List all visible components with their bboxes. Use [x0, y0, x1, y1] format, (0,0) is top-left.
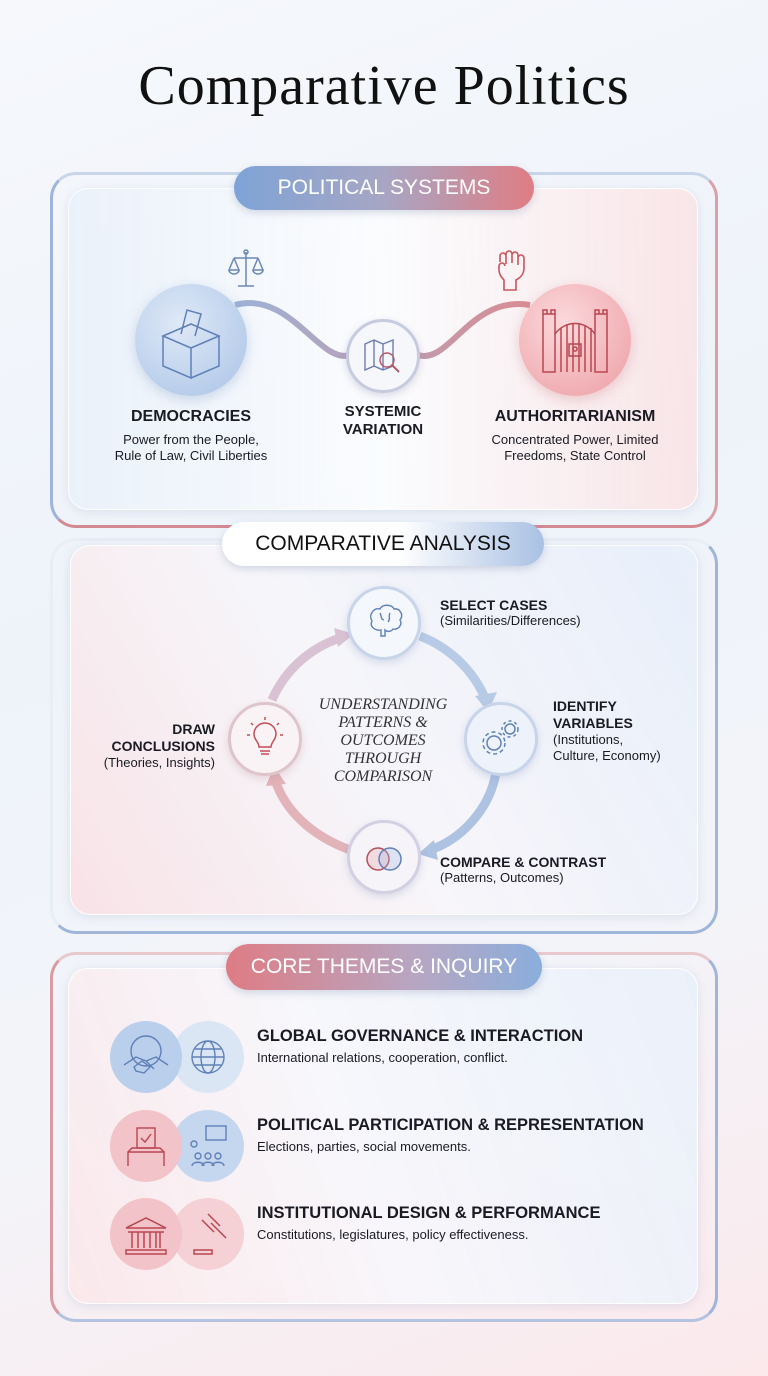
- heading pill: core themes: CORE THEMES & INQUIRY: [251, 955, 517, 978]
- icon: scales: [228, 249, 264, 287]
- text: draw conclusions: [104, 721, 215, 770]
- heading pill: political systems: [234, 166, 534, 210]
- text: select cases: (Similarities/Differences): [440, 613, 581, 628]
- text: identify variables: Culture, Economy): [553, 748, 661, 763]
- icon: lightbulb circle: [228, 702, 302, 776]
- text: compare & contrast: (Patterns, Outcomes): [440, 870, 564, 885]
- row: political participation: [110, 1110, 644, 1182]
- text: draw conclusions: (Theories, Insights): [104, 755, 215, 770]
- heading pill: core themes: [226, 944, 542, 990]
- icon: venn circle: [347, 820, 421, 894]
- heading pill: political systems: POLITICAL SYSTEMS: [278, 176, 490, 199]
- row: global governance: International relations, cooperation, conflict.: [257, 1050, 508, 1065]
- text: select cases: SELECT CASES: [440, 597, 547, 613]
- icon: democracy ballot box circle: [135, 284, 247, 396]
- icon: authoritarian gate circle: [519, 284, 631, 396]
- text: authoritarianism: AUTHORITARIANISM: [495, 408, 655, 425]
- text: democracies: DEMOCRACIES: [131, 408, 251, 425]
- text: authoritarianism: Concentrated Power, Limited: [492, 432, 658, 447]
- icon: ballot and crowd: [172, 1110, 244, 1182]
- text: authoritarianism: [492, 408, 658, 463]
- text: systemic variation: VARIATION: [343, 421, 423, 438]
- text: authoritarianism: Freedoms, State Control: [504, 448, 646, 463]
- text: select cases: [440, 597, 581, 628]
- text: compare & contrast: [440, 854, 606, 885]
- text: systemic variation: [343, 403, 423, 438]
- row: political participation: POLITICAL PARTICIPATION & REPRESENTATION: [257, 1116, 644, 1134]
- panel: political systems: [50, 166, 718, 528]
- row: global governance: GLOBAL GOVERNANCE & INTERACTION: [257, 1027, 583, 1045]
- icon: gears circle: [464, 702, 538, 776]
- icon: handshake globe: [172, 1021, 244, 1093]
- title: Comparative Politics: [138, 55, 630, 117]
- row: institutional design: INSTITUTIONAL DESIGN & PERFORMANCE: [257, 1204, 600, 1222]
- text: identify variables: (Institutions,: [553, 732, 623, 747]
- text: center italic: UNDERSTANDING PATTERNS & OUTCOMES THROUGH COMPARISON: [319, 696, 447, 785]
- icon: systemic variation map circle: [346, 319, 420, 393]
- text: identify variables: [553, 698, 661, 763]
- row: institutional design: Constitutions, legislatures, policy effectiveness.: [257, 1227, 528, 1242]
- icon: fist: [498, 250, 525, 291]
- text: identify variables: IDENTIFY: [553, 698, 617, 714]
- icon: brain circle: [347, 586, 421, 660]
- text: identify variables: VARIABLES: [553, 715, 633, 731]
- cycle arrows: [266, 628, 500, 860]
- text: compare & contrast: COMPARE & CONTRAST: [440, 854, 606, 870]
- text: democracies: Power from the People,: [123, 432, 259, 447]
- heading pill: comparative analysis: COMPARATIVE ANALYSIS: [255, 532, 511, 555]
- row: political participation: Elections, parties, social movements.: [257, 1139, 471, 1154]
- icon: building and gavel: [172, 1198, 244, 1270]
- panel: comparative analysis: [50, 522, 718, 934]
- text: draw conclusions: DRAW: [172, 721, 215, 737]
- text: democracies: [115, 408, 267, 463]
- panel: core themes: [50, 944, 718, 1322]
- wave connector: [234, 300, 530, 359]
- text: democracies: Rule of Law, Civil Liberties: [115, 448, 267, 463]
- heading pill: comparative analysis: [222, 522, 544, 566]
- row: institutional design: [110, 1198, 600, 1270]
- text: systemic variation: SYSTEMIC: [345, 403, 421, 420]
- row: global governance: [110, 1021, 583, 1093]
- text: draw conclusions: CONCLUSIONS: [112, 738, 215, 754]
